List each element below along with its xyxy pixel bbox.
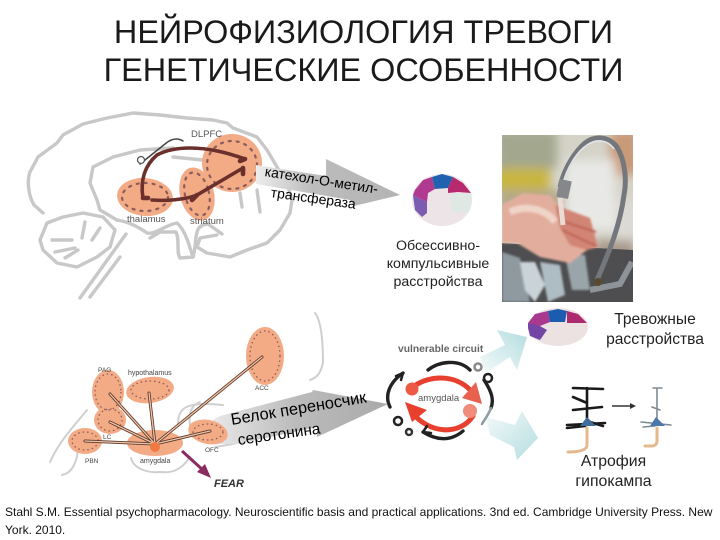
brain outline: top diagram — [28, 113, 292, 298]
label: PBN: PBN — [85, 458, 98, 465]
label: striatum: striatum — [190, 216, 224, 227]
lower brain regions — [68, 327, 284, 456]
label: COMT, line two: трансфераза — [270, 184, 357, 212]
label: anxiety disorders: Тревожные — [614, 311, 696, 328]
label: OCD — [387, 238, 489, 290]
label: PAG: PAG — [98, 367, 111, 374]
title — [104, 14, 623, 88]
teal arrow: to anxiety — [480, 330, 527, 373]
label: thalamus: thalamus — [127, 214, 166, 225]
lower brain outline — [50, 313, 323, 475]
pie wheel: anxiety — [528, 308, 588, 346]
label: OCD: расстройства — [393, 274, 483, 290]
label: amygdala lower: amygdala — [140, 458, 170, 465]
label: hippocampal atrophy: Атрофия — [581, 453, 646, 470]
citation: Stahl S.M. Essential psychopharmacology. Neuroscientific basis and practical applications. 3nd ed. Cambridge University Press. New York. 2010. — [5, 505, 712, 537]
OFC region — [186, 416, 230, 448]
label: LC: LC — [103, 434, 111, 441]
label: OFC: OFC — [205, 447, 219, 454]
label: vulnerable circuit: vulnerable circuit — [398, 344, 483, 355]
label: ACC: ACC — [255, 385, 269, 392]
label: hypothalamus: hypothalamus — [128, 370, 172, 377]
label: OCD: компульсивные — [387, 256, 489, 272]
brain pathways — [138, 139, 245, 200]
gray arrow: COMT — [256, 159, 400, 206]
arrow: atrophy — [612, 403, 636, 409]
teal arrow: to hippocampus — [486, 411, 538, 460]
label: serotonin transporter, line one: Белок переносчик — [229, 388, 368, 429]
label: hippocampal atrophy: гипокампа — [575, 473, 652, 490]
neuron: healthy — [567, 388, 605, 452]
label: amygdala: amygdala — [418, 393, 459, 404]
label: anxiety disorders — [606, 311, 704, 348]
neuron: atrophied — [641, 388, 671, 446]
label: anxiety disorders: расстройства — [606, 331, 704, 348]
label: DLPFC: DLPFC — [191, 129, 222, 140]
arrow: to FEAR — [182, 451, 211, 478]
diagram artwork — [26, 111, 672, 478]
amygdala circuit — [388, 362, 492, 439]
photo: washing hands under tap — [502, 135, 633, 302]
title: ГЕНЕТИЧЕСКИЕ ОСОБЕННОСТИ — [104, 52, 623, 88]
title: НЕЙРОФИЗИОЛОГИЯ ТРЕВОГИ — [114, 14, 613, 50]
label: hippocampal atrophy — [575, 453, 652, 490]
label: FEAR: FEAR — [214, 478, 244, 490]
label: COMT, line one: катехол-О-метил- — [264, 163, 379, 197]
label: OCD: Обсессивно- — [396, 238, 480, 254]
gray arrow: serotonin transporter — [205, 390, 388, 444]
brain regions: thalamus, striatum, DLPFC — [115, 134, 262, 224]
pie wheel: OCD — [412, 174, 472, 226]
region connectors — [85, 357, 262, 444]
label: serotonin transporter, line two: серотонина — [237, 421, 322, 449]
